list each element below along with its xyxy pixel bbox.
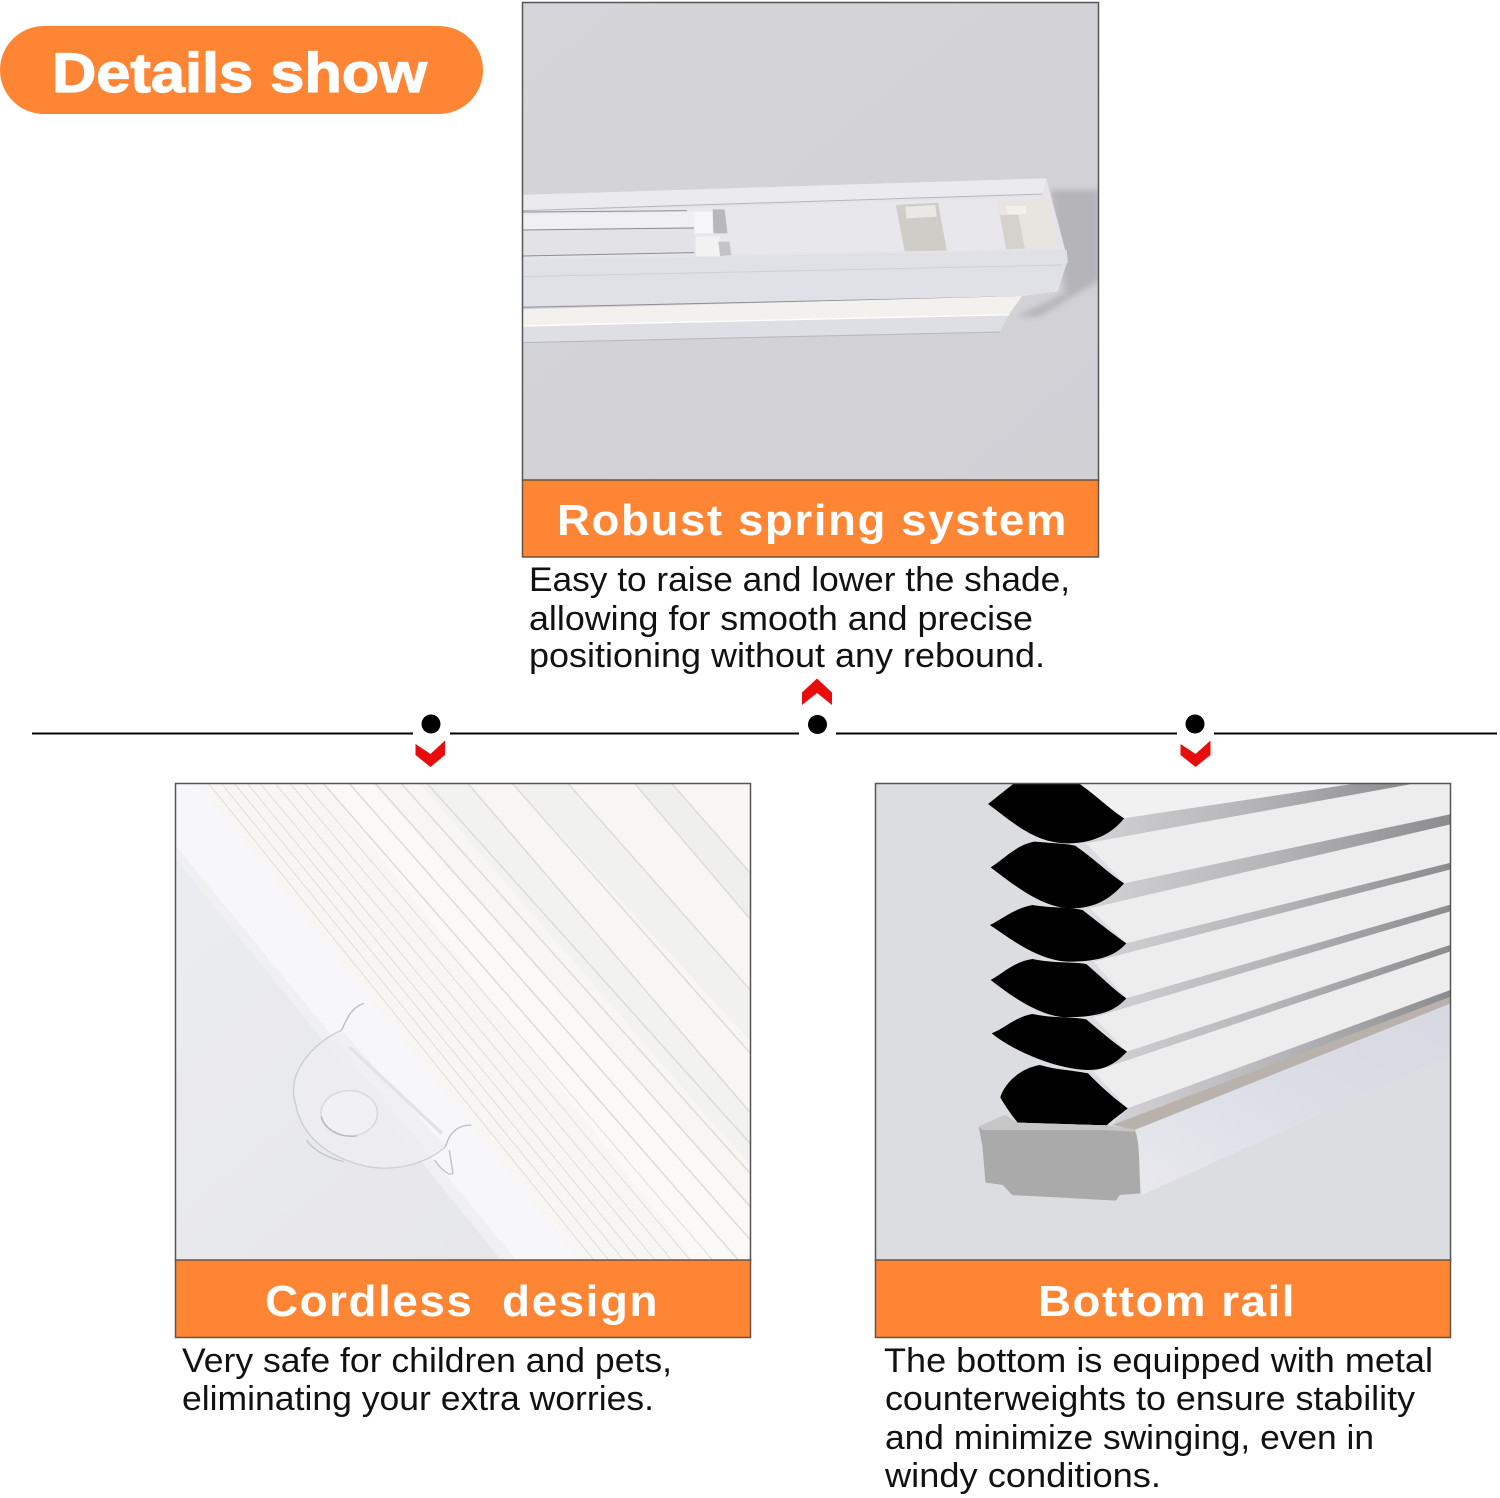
icon: clear clip [294,1003,471,1174]
title pill: Details show [0,26,483,114]
rail body [1116,1106,1257,1194]
panel: Cordless design [175,780,768,1418]
text: bottom rail description: and minimize swinging, even in [885,1419,1374,1457]
text: cordless description: Very safe for children and pets, [182,1342,672,1380]
label bar: Robust spring system: Robust spring system [557,496,1068,545]
text: spring system description: positioning without any rebound. [529,637,1045,675]
label bar: Bottom rail: Bottom rail [1038,1277,1296,1326]
text: bottom rail description [884,1342,1433,1495]
label bar: Robust spring system [522,480,1098,557]
photo: honeycomb cells and bottom rail [875,780,1468,1263]
divider line with markers [32,678,1497,767]
text: spring system description: Easy to raise and lower the shade, [529,561,1070,599]
marker: left dot and down arrow [416,714,445,767]
marker: right dot and down arrow [1180,714,1210,767]
text: spring system description [529,561,1070,675]
label bar: Cordless design: Cordless design [265,1277,659,1326]
panel: Bottom rail [875,780,1468,1495]
end cap [979,1115,1140,1201]
text: cordless description: eliminating your extra worries. [182,1380,654,1418]
text: bottom rail description: windy conditions. [884,1457,1161,1495]
title pill: Details show: Details show [52,41,427,104]
icon: black cell openings [988,783,1128,1125]
panel: Robust spring system [520,2,1100,675]
text: bottom rail description: The bottom is equipped with metal [884,1342,1433,1380]
photo: pleated fabric and clear clip [175,780,768,1263]
cell faces [1079,783,1357,818]
label bar: Cordless design [176,1260,750,1338]
text: spring system description: allowing for smooth and precise [529,600,1033,638]
text: cordless description [182,1342,672,1418]
text: bottom rail description: counterweights to ensure stability [885,1380,1415,1418]
photo: headrail with spring [520,3,1100,480]
label bar: Bottom rail [876,1260,1450,1338]
marker: centre dot and up arrow [802,678,832,734]
